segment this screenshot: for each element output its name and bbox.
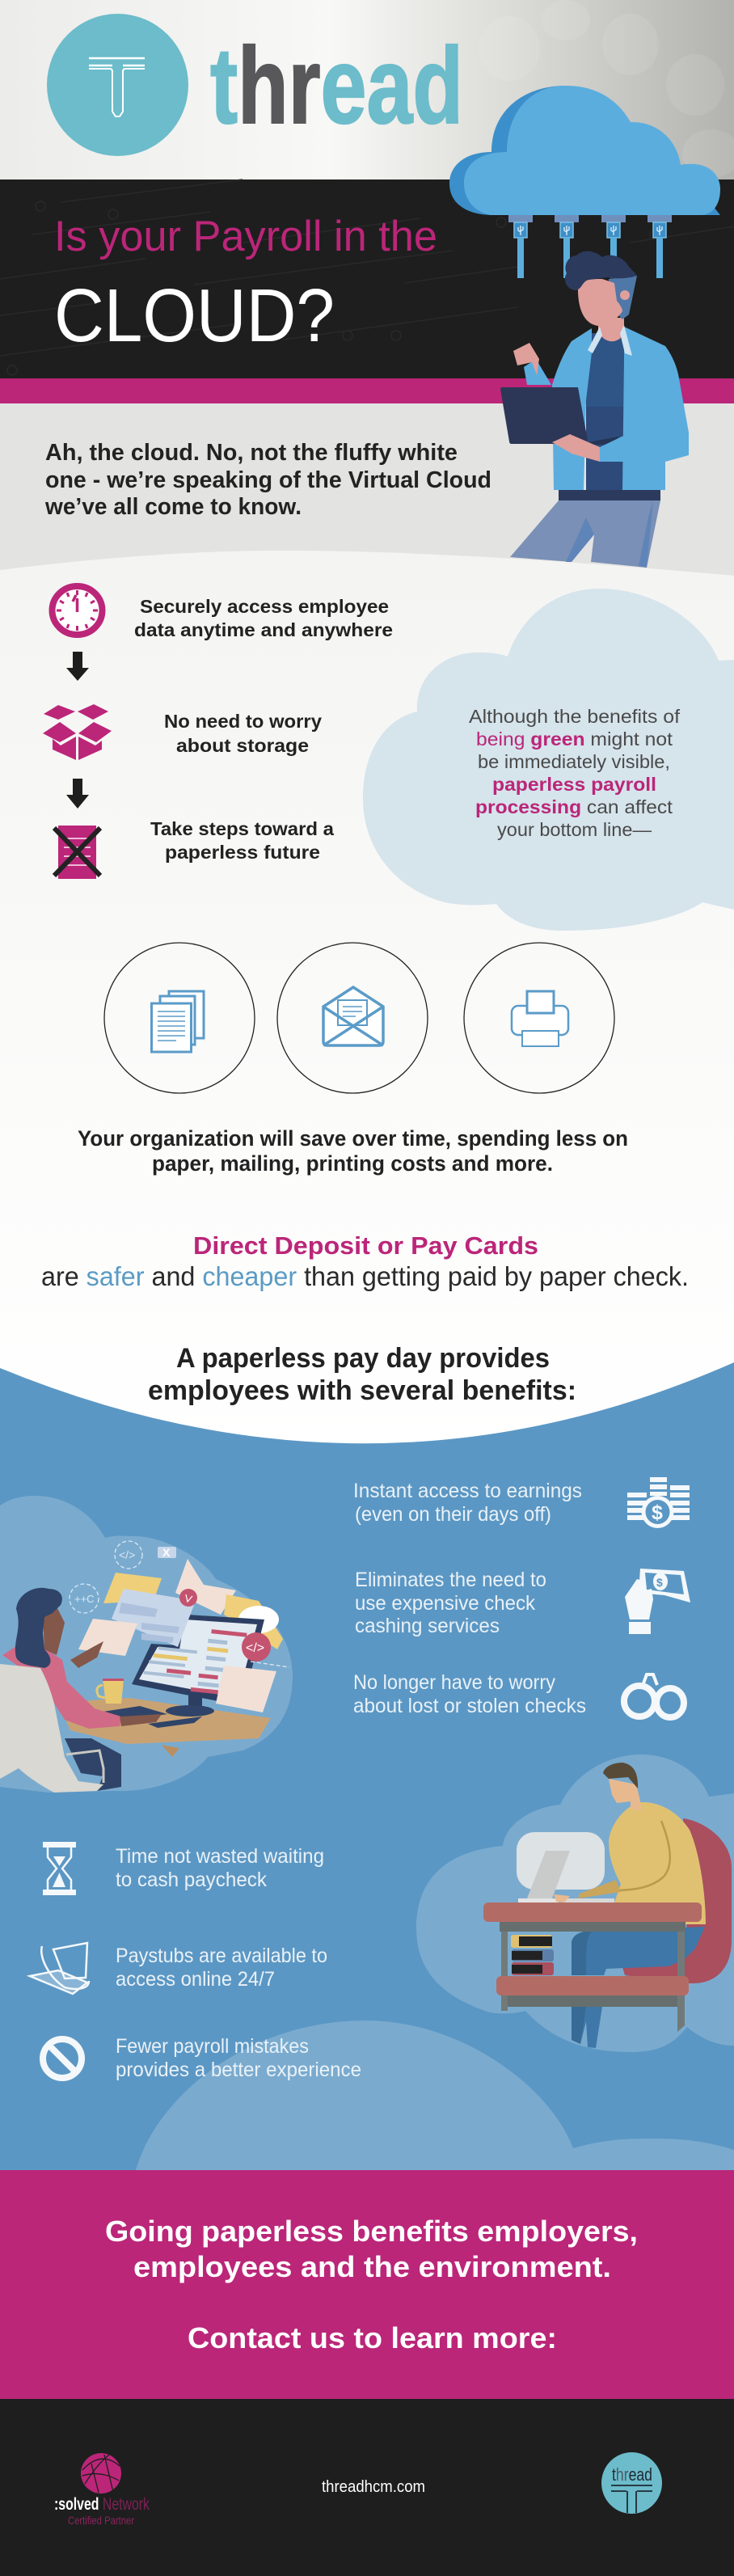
benefit: paystubs online: Paystubs are available to [116, 1945, 327, 1967]
illustration: woman at desk: ++C [74, 1593, 95, 1605]
illustration: man with laptop [500, 251, 689, 568]
text: savings summary [78, 1126, 628, 1176]
text: savings summary: paper, mailing, printing costs and more. [152, 1151, 553, 1176]
icon: hand with cash [625, 1569, 690, 1634]
panel: footer [0, 2399, 734, 2576]
benefit: paystubs online: access online 24/7 [116, 1968, 275, 1991]
panel: magenta call to action [0, 2170, 734, 2399]
benefit: time not wasted [43, 1842, 324, 1895]
heading: paperless pay day: employees with several benefits: [148, 1375, 576, 1406]
callout text: your bottom line— [497, 819, 652, 840]
illustration: man at computer [416, 1755, 734, 2052]
step text: secure access: data anytime and anywhere [134, 619, 393, 640]
illustration: woman at desk: </> [119, 1548, 135, 1561]
logo: isolved network: :solved Network [54, 2495, 150, 2514]
icon: handcuffs [624, 1674, 684, 1717]
step text: paperless future: Take steps toward a [150, 818, 334, 839]
benefit: fewer mistakes: Fewer payroll mistakes [116, 2035, 309, 2058]
icon: crossed-out paper [54, 826, 100, 879]
benefit: paystubs online [30, 1943, 327, 1994]
intro text [44, 440, 491, 520]
logo: isolved network: Certified Partner [68, 2514, 134, 2527]
heading: paperless pay day: A paperless pay day provides [176, 1343, 550, 1374]
illustration: woman at desk: X [162, 1546, 171, 1559]
logo: thread wordmark: thread [210, 26, 463, 146]
benefit: instant access: Instant access to earnings [353, 1480, 582, 1502]
step text: storage: No need to worry [164, 711, 322, 732]
arrow: down 1 [66, 652, 89, 681]
step text: storage: about storage [176, 735, 309, 756]
panel: black title band [0, 179, 734, 378]
benefit: instant access [353, 1477, 690, 1528]
panel: header background [0, 0, 734, 179]
panel: main light section [0, 551, 734, 1455]
step text: paperless future [150, 818, 334, 863]
text: website: threadhcm.com [322, 2478, 425, 2496]
call to action text [105, 2215, 638, 2354]
heading: CLOUD?: CLOUD? [54, 273, 335, 357]
callout text: processing can affect [475, 796, 673, 817]
illustration: woman at desk: </> [246, 1641, 264, 1655]
callout text: be immediately visible, [478, 751, 670, 772]
benefit: lost or stolen [353, 1671, 684, 1717]
heading: Is your Payroll in the: Is your Payroll in the [54, 213, 437, 260]
arrow: down 2 [66, 779, 89, 809]
step text: paperless future: paperless future [165, 842, 320, 863]
callout text: paperless payroll [492, 774, 656, 795]
panel: grey intro band [0, 403, 734, 581]
heading: paperless pay day [148, 1343, 576, 1406]
benefit: check cashing [355, 1569, 690, 1637]
icon: coins: $ [652, 1501, 663, 1524]
logo: isolved network [54, 2453, 150, 2527]
step text: storage [164, 711, 322, 756]
text: savings summary: Your organization will save over time, spending less on [78, 1126, 628, 1151]
icon: no sign [43, 2039, 82, 2078]
benefit: check cashing: use expensive check [355, 1592, 535, 1615]
logo: thread circle mark [47, 14, 188, 156]
call to action text: employees and the environment. [133, 2250, 611, 2283]
illustration: blue cloud with USB cables [449, 86, 720, 278]
benefit: fewer mistakes: provides a better experience [116, 2059, 361, 2081]
call to action text: Going paperless benefits employers, [105, 2215, 638, 2248]
benefit: time not wasted: to cash paycheck [116, 1869, 267, 1891]
icon: coins [627, 1477, 690, 1528]
callout: pale cloud [363, 589, 734, 931]
background cloud: bottom [136, 2021, 734, 2170]
panel: blue benefits section [0, 1362, 734, 2170]
benefit: lost or stolen: No longer have to worry [353, 1671, 555, 1694]
icon circle: envelope [277, 943, 428, 1093]
callout text: Although the benefits of [469, 706, 681, 727]
benefit: check cashing: Eliminates the need to [355, 1569, 546, 1591]
icon: hourglass [43, 1842, 76, 1895]
icon: open box [43, 704, 112, 760]
benefit: instant access: (even on their days off) [355, 1503, 551, 1526]
icon circle: printer [464, 943, 614, 1093]
icon: hand with cash: $ [656, 1576, 663, 1589]
logo: thread footer badge [601, 2452, 662, 2514]
icon: laptop [30, 1943, 89, 1994]
benefit: fewer mistakes [43, 2035, 361, 2081]
heading: Direct Deposit or Pay Cards: Direct Deposit or Pay Cards [193, 1231, 538, 1260]
intro text: one - we’re speaking of the Virtual Cloud [45, 467, 491, 493]
illustration: woman at desk [0, 1496, 293, 1793]
step text: secure access [134, 596, 393, 640]
intro text: we’ve all come to know. [44, 494, 302, 520]
logo: thread footer badge: thread [612, 2464, 652, 2485]
icon circle: documents [104, 943, 255, 1093]
benefit: time not wasted: Time not wasted waiting [116, 1845, 324, 1868]
call to action text: Contact us to learn more: [188, 2321, 557, 2354]
callout text [469, 706, 681, 840]
intro text: Ah, the cloud. No, not the fluffy white [45, 440, 458, 466]
callout text: being green might not [476, 728, 673, 750]
step text: secure access: Securely access employee [140, 596, 389, 617]
text: safer and cheaper: are safer and cheaper than getting paid by paper check. [41, 1261, 689, 1291]
magenta stripe [0, 378, 734, 403]
benefit: lost or stolen: about lost or stolen checks [353, 1695, 586, 1717]
benefit: check cashing: cashing services [355, 1615, 500, 1637]
icon: clock [52, 586, 102, 635]
